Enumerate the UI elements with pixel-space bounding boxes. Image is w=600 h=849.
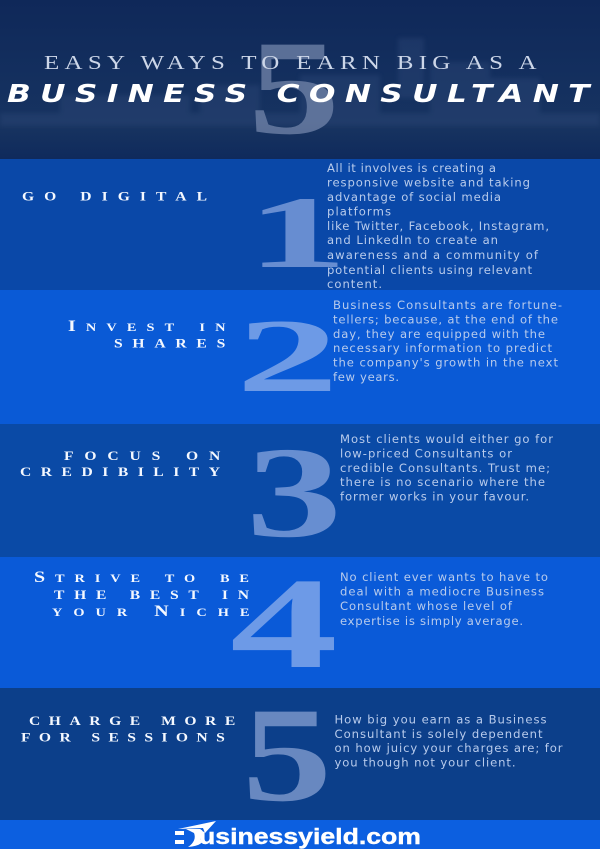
body text: Most clients would either go for: [340, 432, 553, 446]
heading: [34, 568, 250, 620]
number 4: 4: [230, 552, 338, 696]
body text: deal with a mediocre Business: [340, 584, 544, 598]
number 2: 2: [236, 297, 339, 414]
body text: the company's growth in the next: [333, 356, 558, 370]
title line 1: EASY WAYS TO EARN BIG AS A: [44, 51, 537, 73]
panel: charge more: [0, 681, 600, 830]
panel: invest in shares: [0, 290, 600, 424]
body text: awareness and a community of: [327, 248, 539, 262]
body text: Business Consultants are fortune-: [333, 298, 562, 312]
body text: like Twitter, Facebook, Instagram,: [327, 219, 549, 233]
body text: All it involves is creating a: [327, 161, 496, 175]
heading: Invest in: [68, 317, 226, 335]
heading: [20, 449, 221, 480]
heading: CREDIBILITY: [20, 465, 220, 480]
body text: responsive website and taking: [327, 176, 530, 190]
heading: Strive to be: [34, 568, 249, 586]
body text: and LinkedIn to create an: [327, 233, 498, 247]
footer: [0, 820, 600, 849]
heading: CHARGE MORE: [29, 714, 235, 729]
body text: tellers; because, at the end of the: [333, 312, 558, 326]
panel: focus on credibility: [0, 421, 600, 565]
body text: [333, 298, 562, 384]
body text: credible Consultants. Trust me;: [340, 461, 550, 475]
heading: FOCUS ON: [64, 449, 221, 464]
site name: usinessyield.com: [199, 824, 421, 849]
heading: [68, 317, 226, 351]
big number 5: 5: [248, 14, 340, 163]
title line 2: BUSINESS CONSULTANT: [7, 79, 592, 108]
body text: [334, 712, 563, 770]
body text: [340, 570, 548, 628]
body text: low-priced Consultants or: [340, 446, 512, 460]
body text: few years.: [333, 370, 399, 384]
body text: day, they are equipped with the: [333, 327, 545, 341]
number 5: 5: [242, 681, 332, 830]
header panel: [0, 0, 600, 163]
number 3: 3: [246, 421, 342, 565]
heading: GO DIGITAL: [22, 190, 207, 204]
body text: Consultant whose level of: [340, 599, 513, 613]
panel: strive to be the best: [0, 552, 600, 696]
body text: you though not your client.: [334, 756, 516, 770]
number 1: 1: [246, 176, 348, 290]
body text: former works in your favour.: [340, 490, 529, 504]
logo mark: [175, 821, 216, 847]
heading: your Niche: [52, 602, 250, 620]
body text: potential clients using relevant: [327, 263, 532, 277]
body text: [340, 432, 553, 504]
body text: advantage of social media: [327, 190, 501, 204]
body text: content.: [327, 277, 382, 291]
heading: [21, 714, 235, 745]
panel: go digital: [0, 159, 600, 291]
body text: No client ever wants to have to: [340, 570, 548, 584]
body text: expertise is simply average.: [340, 614, 523, 628]
body text: platforms: [327, 204, 391, 218]
heading: THE BEST IN: [54, 588, 250, 603]
heading: FOR SESSIONS: [21, 731, 225, 745]
body text: necessary information to predict: [333, 341, 552, 355]
body text: Consultant is solely dependent: [334, 727, 543, 741]
skyline backdrop: [0, 38, 600, 126]
body text: on how juicy your charges are; for: [334, 741, 563, 755]
heading: SHARES: [114, 337, 225, 351]
body text: there is no scenario where the: [340, 475, 545, 489]
body text: [327, 161, 549, 291]
body text: How big you earn as a Business: [334, 712, 546, 726]
